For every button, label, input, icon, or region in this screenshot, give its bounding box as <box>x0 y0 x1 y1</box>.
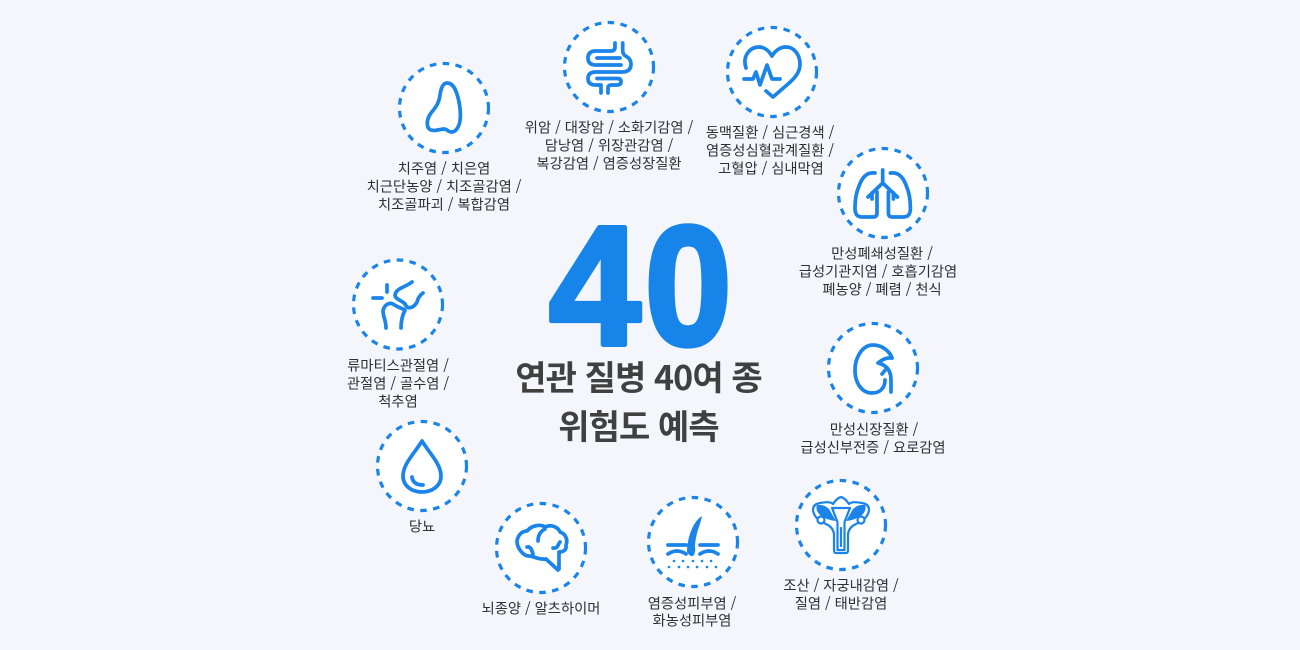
label: reproductive: 질염 / 태반감염 <box>795 593 887 614</box>
label: digestive <box>525 117 694 174</box>
heading: 위험도 예측 <box>558 400 719 449</box>
icon: joint <box>373 282 423 328</box>
label: digestive: 위암 / 대장암 / 소화기감염 / <box>525 117 694 138</box>
heading <box>515 351 762 449</box>
label: renal <box>800 419 946 458</box>
label: respiratory: 급성기관지염 / 호흡기감염 <box>799 261 957 282</box>
label: skin <box>648 593 737 631</box>
label: reproductive: 조산 / 자궁내감염 / <box>783 575 899 596</box>
label: musculoskeletal: 척추염 <box>378 391 418 412</box>
icon: lungs <box>855 170 910 217</box>
icon: brain <box>517 525 567 570</box>
label: respiratory <box>799 243 957 300</box>
icon: intestine <box>588 43 631 93</box>
label: renal: 급성신부전증 / 요로감염 <box>800 437 946 458</box>
label: dental: 치조골파괴 / 복합감염 <box>378 194 510 215</box>
item: reproductive <box>783 480 899 614</box>
label: cardiovascular: 고혈압 / 심내막염 <box>718 158 824 179</box>
big number 40: 0 <box>645 192 732 382</box>
icon: kidney <box>855 345 892 393</box>
label: cardiovascular: 동맥질환 / 심근경색 / <box>706 122 835 143</box>
label: musculoskeletal: 류마티스관절염 / <box>347 355 449 376</box>
item: cardiovascular <box>706 28 835 179</box>
label: musculoskeletal <box>347 355 449 412</box>
label: reproductive <box>783 575 899 614</box>
item: renal <box>800 324 946 458</box>
item: musculoskeletal <box>347 260 449 412</box>
item: dental <box>367 64 522 215</box>
label: digestive: 담낭염 / 위장관감염 / <box>545 135 674 156</box>
item: respiratory <box>799 148 957 300</box>
label: dental <box>367 158 522 215</box>
icon: uterus <box>813 497 869 553</box>
label: skin: 화농성피부염 <box>653 610 731 631</box>
label: dental: 치근단농양 / 치조골감염 / <box>367 176 522 197</box>
label: cardiovascular: 염증성심혈관계질환 / <box>706 140 834 161</box>
label: digestive: 복강감염 / 염증성장질환 <box>536 153 682 174</box>
item: skin <box>648 498 738 631</box>
item: brain <box>482 504 600 619</box>
heading: 연관 질병 40여 종 <box>515 351 762 400</box>
big number 40: 4 <box>549 192 641 382</box>
label: skin: 염증성피부염 / <box>648 593 737 614</box>
item: digestive <box>525 22 694 174</box>
label: respiratory: 폐농양 / 폐렴 / 천식 <box>822 279 942 300</box>
label: respiratory: 만성폐쇄성질환 / <box>831 243 933 264</box>
label: renal: 만성신장질환 / <box>830 419 919 440</box>
icon: hair follicle skin <box>668 516 718 568</box>
label: musculoskeletal: 관절염 / 골수염 / <box>347 373 449 394</box>
label: diabetes: 당뇨 <box>409 516 435 537</box>
label: cardiovascular <box>706 122 835 179</box>
label: dental: 치주염 / 치은염 <box>398 158 490 179</box>
icon: heart with pulse <box>744 47 800 97</box>
label: brain: 뇌종양 / 알츠하이머 <box>482 598 600 619</box>
icon: tooth <box>427 83 460 132</box>
icon: water drop <box>403 441 441 492</box>
big number 40 <box>549 192 732 382</box>
item: diabetes <box>378 422 466 537</box>
